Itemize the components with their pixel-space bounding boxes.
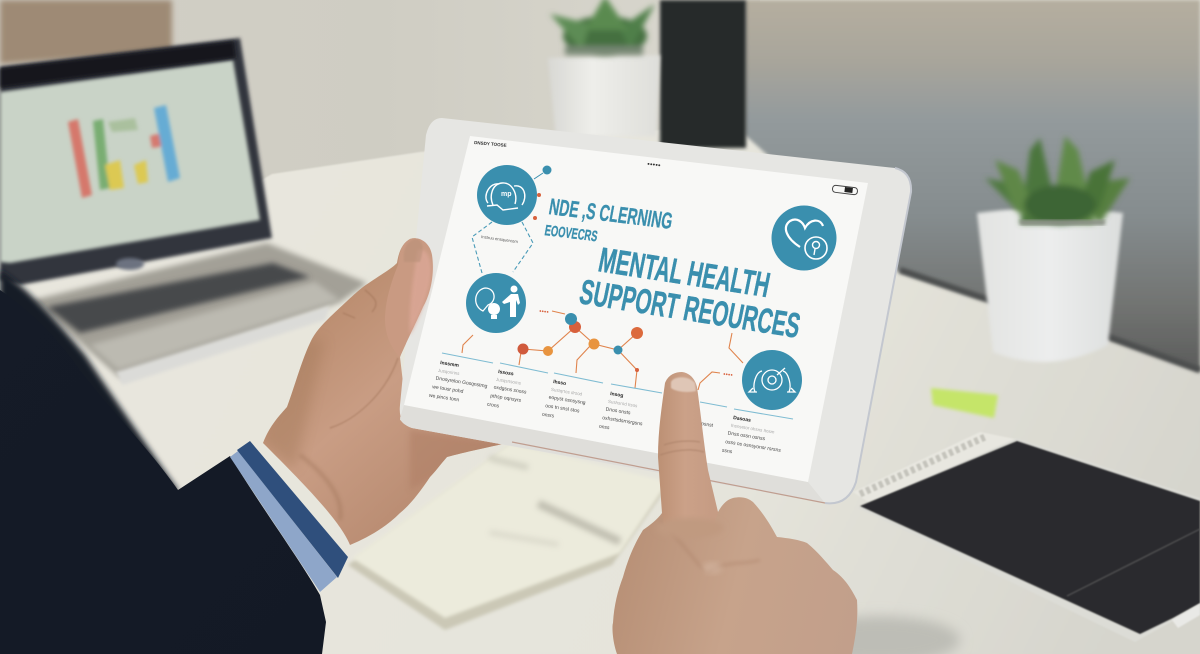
text column 4: [598, 390, 647, 436]
heading: sub-title: NDE ,S CLERNING: [547, 193, 675, 234]
title: MENTAL HEALTH: [595, 241, 773, 305]
title: [576, 241, 804, 346]
text column 1: [428, 359, 490, 407]
dark tablet case: [858, 438, 1200, 642]
thumb nail: [404, 239, 423, 262]
right plant in white pot: [977, 136, 1130, 362]
dashed hexagon connector: [472, 222, 533, 273]
heading: sub-title: EOOVECRS: [543, 222, 599, 245]
text column 5 partly hidden: psnst: [701, 421, 714, 429]
left thumb over tablet edge: [385, 238, 433, 357]
status bar: [474, 140, 858, 195]
text column 6: Ihsnsetor ohsns Itosm: [731, 423, 775, 435]
text column 1: we tousr pohd: [432, 384, 464, 395]
icon: people circle: [477, 165, 537, 225]
icon: heart and key circle: [772, 206, 836, 270]
title: SUPPORT REOURCES: [576, 273, 804, 346]
text column 1: Inssmm: [440, 360, 460, 369]
text column 2: Issoss: [498, 369, 514, 377]
text column 3: Sustqrtos drsod: [551, 387, 583, 397]
text column 3: Ihsso: [553, 379, 567, 387]
text column 4: oxhsrtsdsrnsrgsns: [602, 415, 643, 427]
right hand fist: [612, 497, 857, 654]
network chart: [462, 308, 743, 390]
network chart: ●●●●: [723, 371, 734, 377]
text column 1: Jusqoririns: [438, 368, 461, 376]
text column 2: pthsp oqnsyrs: [490, 393, 522, 404]
text column 6: osss os osnsyonsr rsrsns: [725, 439, 782, 454]
text column 2: crons: [486, 402, 500, 410]
text column 3: [541, 378, 589, 424]
icon: speech bubble and person circle: [466, 273, 526, 333]
text column 4: Dnos onsts: [605, 407, 631, 416]
text column 2: oxdgsns snoss: [493, 385, 527, 396]
text column 6: Dnss ossn osnss: [727, 430, 766, 442]
tablet device: [400, 118, 911, 503]
pointing finger: [656, 372, 724, 538]
center plant in white pot: [548, 0, 660, 138]
spiral notebook: [853, 432, 1020, 503]
sticky note: [931, 388, 998, 418]
status bar: DNSDY TOOSE: [474, 140, 507, 148]
text column 2: [486, 368, 530, 413]
text column 4: onss: [598, 424, 610, 431]
laptop on desk: [0, 38, 367, 385]
text column 3: onsrs: [541, 412, 555, 420]
text column 1: we pincs tonn: [428, 393, 460, 403]
heading: sub-title: [543, 193, 675, 245]
text column 6: ssns: [721, 448, 733, 455]
dashed hexagon connector: Instruu ensquercom: [481, 234, 519, 244]
paper notebook under tablet: [348, 443, 668, 630]
text column 3: oos tn snsl stos: [545, 403, 580, 415]
left hand palm: [260, 238, 510, 545]
connector dots: [533, 166, 552, 220]
window panel and dark pillar: [660, 0, 1200, 372]
text column 2: Jusqsrtsoms: [496, 377, 522, 386]
icon: target and bells circle: [742, 350, 802, 410]
status bar: ●●●●●: [647, 161, 661, 168]
text column 4: Sushsrod Itsos: [608, 399, 639, 409]
text column 6: [721, 414, 786, 463]
icon: people circle: mp: [501, 191, 512, 198]
text column 6: Dasoas: [733, 415, 751, 424]
network chart: ●●●●: [539, 308, 550, 314]
text column 3: eopyst osnsysng: [548, 395, 586, 406]
column rules: [442, 353, 793, 419]
tablet screen: [404, 136, 868, 482]
text column 1: Dnosyrelon Gosqnstmg: [435, 376, 488, 390]
shadow on desk: [800, 616, 960, 654]
text column 4: Insog: [610, 391, 624, 399]
shirt cuff: [230, 441, 348, 592]
suit sleeve: [0, 270, 326, 654]
